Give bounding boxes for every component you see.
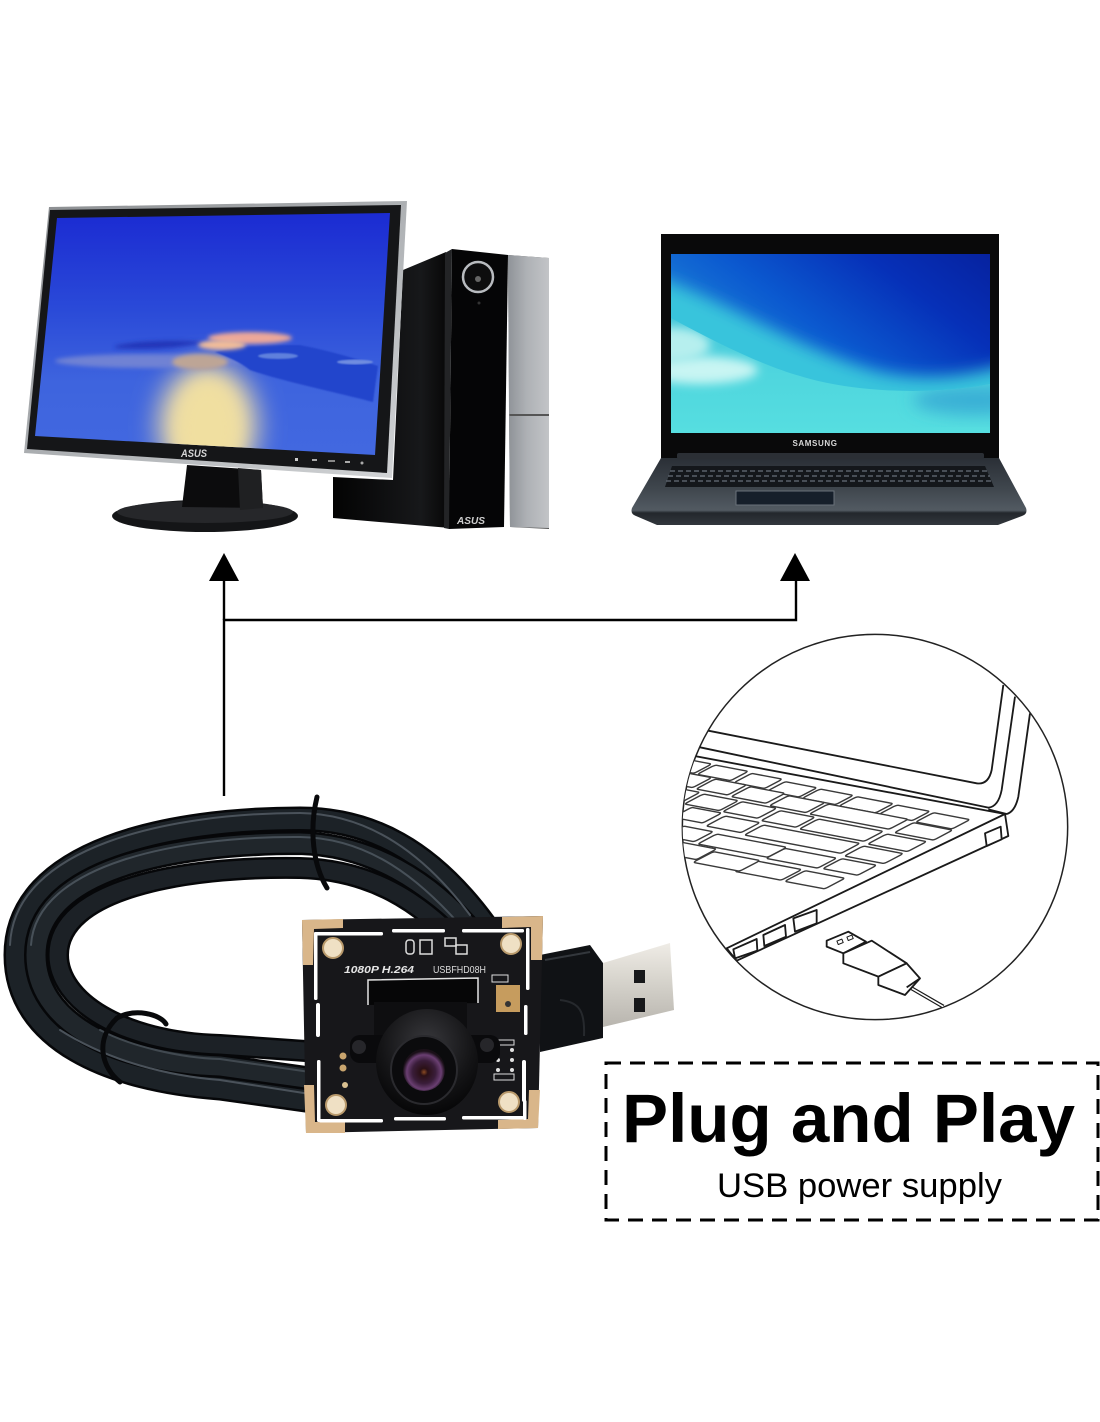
- USB plug line drawing: [827, 932, 943, 1007]
- mounting holes: [323, 934, 521, 1115]
- laptop keys: [682, 760, 970, 890]
- camera circuit board: [302, 916, 543, 1133]
- photo: USB camera module with coiled cable: [10, 797, 674, 1133]
- icon: laptop computer: SAMSUNG: [792, 439, 838, 448]
- board markings: USBFHD08H: [433, 965, 486, 976]
- cable ties: [103, 797, 327, 1082]
- USB plug connector: [540, 943, 674, 1052]
- laptop keyboard: [665, 466, 994, 487]
- icon: desktop computer with monitor and tower: [24, 201, 549, 532]
- callout: Plug and Play: [606, 1063, 1098, 1220]
- laptop lid: [661, 234, 999, 458]
- lens holder: [350, 978, 500, 1063]
- laptop base: [632, 458, 1026, 525]
- icon: monitor stand: [112, 465, 298, 532]
- laptop hinge: [677, 453, 984, 459]
- laptop ports: [733, 827, 1002, 958]
- USB cable coil: [10, 813, 485, 1102]
- laptop screen wallpaper: [671, 254, 990, 433]
- board markings: [340, 938, 520, 1088]
- icon: monitor: [24, 201, 407, 487]
- board markings: 1080P H.264: [344, 964, 414, 976]
- subheading: USB power supply: [717, 1167, 1003, 1205]
- icon: monitor: ASUS: [180, 448, 208, 460]
- camera lens: [376, 1009, 478, 1115]
- icon: PC tower: ASUS: [456, 516, 485, 527]
- icon: PC tower: [333, 249, 549, 529]
- laptop body outlines: [680, 685, 1030, 961]
- arrow: connection from camera to computer and laptop: [209, 553, 810, 796]
- illustration: USB plug inserted into laptop port, in a circle: [651, 634, 1068, 1020]
- icon: laptop computer: [630, 234, 1037, 525]
- laptop touchpad: [736, 491, 834, 505]
- heading: Plug and Play: [622, 1080, 1075, 1157]
